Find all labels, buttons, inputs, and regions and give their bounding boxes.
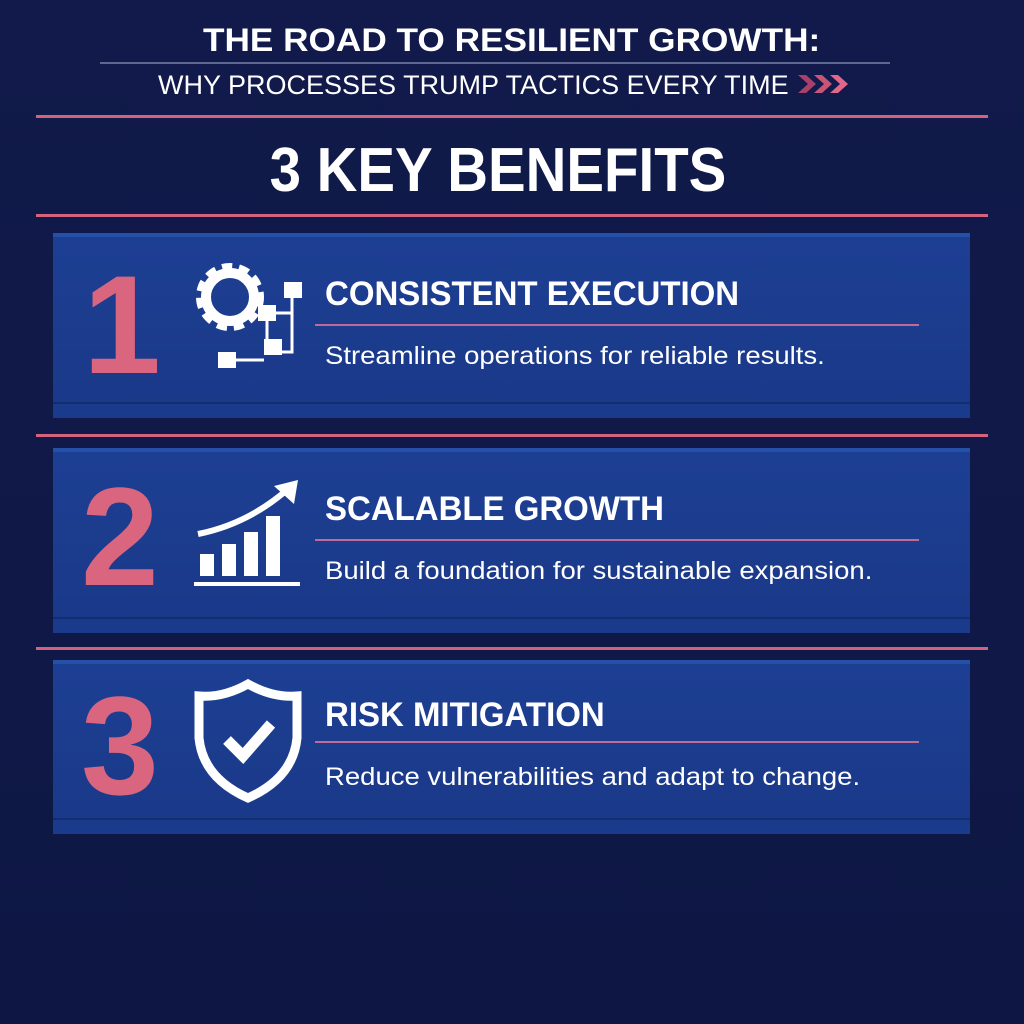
icon: shield check <box>194 678 302 803</box>
title: THE ROAD TO RESILIENT GROWTH: <box>203 22 821 58</box>
text: Build a foundation for sustainable expansion. <box>325 557 872 585</box>
number 2: 2 <box>81 458 159 615</box>
icon: growth chart <box>194 480 300 586</box>
heading: scalable growth: SCALABLE GROWTH <box>325 490 664 528</box>
panel 3 <box>53 660 970 834</box>
heading: risk mitigation: RISK MITIGATION <box>325 696 605 734</box>
text: Streamline operations for reliable results. <box>325 342 825 370</box>
number 3: 3 <box>81 667 159 824</box>
heading: 3 key benefits: 3 KEY BENEFITS <box>270 136 726 205</box>
subtitle: WHY PROCESSES TRUMP TACTICS EVERY TIME <box>158 70 789 100</box>
number 1: 1 <box>83 246 161 403</box>
panel 1 <box>53 233 970 418</box>
heading: consistent execution: CONSISTENT EXECUTION <box>325 275 739 313</box>
text: Reduce vulnerabilities and adapt to change. <box>325 763 860 791</box>
panel 2 <box>53 448 970 633</box>
icon: gear flowchart <box>196 263 302 368</box>
